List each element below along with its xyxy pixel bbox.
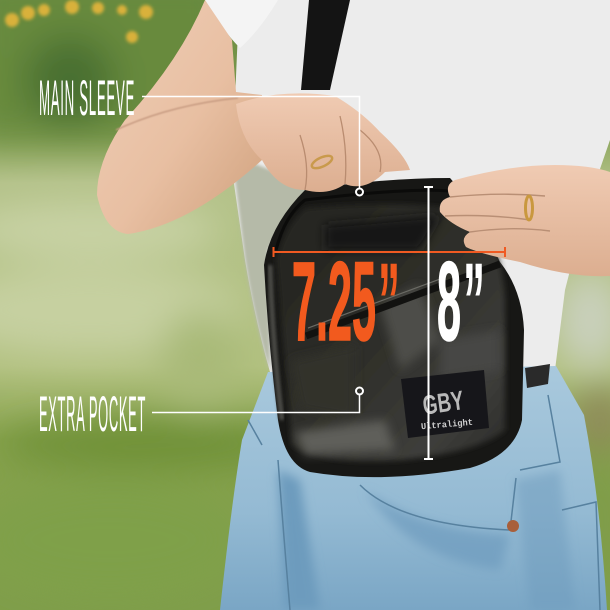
arm: upper arm and forearm	[97, 0, 262, 234]
right hand	[440, 165, 610, 276]
belt	[525, 364, 550, 388]
bag label patch: Ultralight	[421, 418, 473, 432]
bag label patch: GBY	[421, 385, 466, 421]
callout: main sleeve	[39, 70, 363, 196]
infographic: bag dimensions photo: ”	[463, 240, 485, 365]
callout: extra pocket: EXTRA POCKET	[39, 386, 146, 442]
jeans	[220, 366, 607, 610]
bag top edge zipper	[276, 190, 460, 250]
left hand	[236, 93, 410, 192]
shoulder strap	[301, 0, 350, 90]
icon: jeans rivet	[507, 520, 519, 532]
bag zipper	[306, 264, 500, 336]
bag left rim highlight	[270, 265, 282, 420]
bag label patch	[401, 370, 489, 438]
torso: white shirt	[205, 0, 610, 372]
icon: blurred yellow flowers	[5, 0, 153, 43]
dimension: height 8 inches: 8	[437, 239, 461, 364]
icon: ring	[526, 196, 532, 220]
arm crease	[116, 98, 238, 130]
jeans details	[248, 395, 600, 610]
shirt shadow below the arm	[232, 155, 310, 372]
dimension: height 8 inches	[424, 187, 485, 459]
dimension: width 7.25 inches: 7.25	[292, 239, 376, 364]
bag	[264, 178, 524, 477]
jeans denim shading	[278, 470, 575, 610]
callout: main sleeve: MAIN SLEEVE	[39, 70, 135, 126]
icon: ring	[310, 153, 334, 171]
bag highlights	[290, 215, 500, 455]
shirt sleeve	[205, 0, 278, 48]
dimension: width 7.25 inches: ”	[378, 240, 400, 365]
